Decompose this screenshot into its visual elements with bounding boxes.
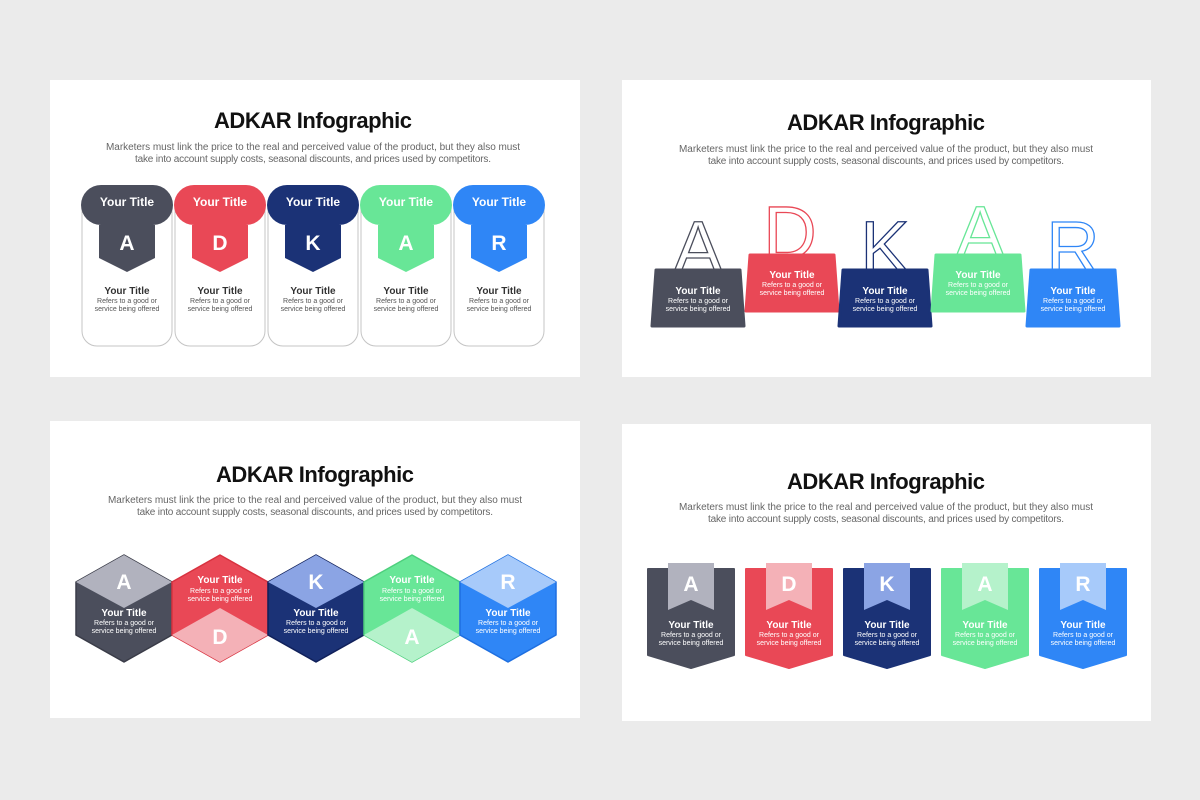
panel: bottom-left hexagons: Refers to a good or xyxy=(478,620,539,627)
panel: bottom-left hexagons: service being offered xyxy=(380,596,445,603)
cards: Refers to a good or xyxy=(97,298,158,305)
panel: top-right outlined letters: Refers to a good or xyxy=(668,298,729,305)
cards: Your Title xyxy=(379,195,433,209)
cards: service being offered xyxy=(95,306,160,313)
cards: Your Title xyxy=(104,286,150,297)
title: ADKAR Infographic xyxy=(787,110,985,135)
panel: bottom-right banners: K xyxy=(879,573,895,596)
panel: bottom-right banners: service being offered xyxy=(757,640,822,647)
cards: Your Title xyxy=(290,286,336,297)
subtitle: take into account supply costs, seasonal discounts, and prices used by competitors. xyxy=(708,156,1064,167)
panel: bottom-right banners: Refers to a good or xyxy=(955,632,1016,639)
panel: top-right outlined letters: service being offered xyxy=(946,290,1011,297)
panel: bottom-right banners: Your Title xyxy=(668,620,714,631)
subtitle: Marketers must link the price to the real and perceived value of the product, but they also must xyxy=(108,495,522,506)
panel: bottom-left hexagons: Refers to a good or xyxy=(94,620,155,627)
cards xyxy=(81,185,545,346)
outlined letters: D xyxy=(763,191,817,274)
cards: Refers to a good or xyxy=(190,298,251,305)
outlined letters: A xyxy=(673,206,723,289)
panel: bottom-right banners xyxy=(622,424,1151,721)
trapezoid boxes xyxy=(652,255,1119,326)
panel: bottom-left hexagons: service being offered xyxy=(284,628,349,635)
panel: bottom-left hexagons: D xyxy=(212,626,228,649)
subtitle: take into account supply costs, seasonal discounts, and prices used by competitors. xyxy=(708,514,1064,525)
panel: bottom-right banners: Refers to a good or xyxy=(759,632,820,639)
panel: bottom-left hexagons: service being offered xyxy=(476,628,541,635)
panel: top-right outlined letters: service being offered xyxy=(666,306,731,313)
subtitle: Marketers must link the price to the real and perceived value of the product, but they also must xyxy=(679,144,1093,155)
cards: service being offered xyxy=(467,306,532,313)
panel: top-right outlined letters: Your Title xyxy=(1050,286,1096,297)
title: ADKAR Infographic xyxy=(216,462,414,487)
cards: Your Title xyxy=(476,286,522,297)
cards: Your Title xyxy=(383,286,429,297)
cards: Your Title xyxy=(193,195,247,209)
subtitle: take into account supply costs, seasonal discounts, and prices used by competitors. xyxy=(137,507,493,518)
panel: top-left card layout xyxy=(50,80,580,377)
panel: top-right outlined letters: service being offered xyxy=(853,306,918,313)
panel: bottom-right banners: service being offered xyxy=(659,640,724,647)
panel: top-right outlined letters: Your Title xyxy=(675,286,721,297)
outlined letters: A xyxy=(955,191,1005,274)
cards: Refers to a good or xyxy=(283,298,344,305)
panel: bottom-right banners: A xyxy=(977,573,993,596)
panel: bottom-left hexagons: Refers to a good or xyxy=(286,620,347,627)
outlined letters xyxy=(673,191,1100,289)
hexagons xyxy=(76,555,556,662)
title: ADKAR Infographic xyxy=(787,469,985,494)
panel: bottom-left hexagons xyxy=(50,421,580,718)
subtitle xyxy=(108,495,522,518)
subtitle xyxy=(106,142,520,165)
panel: bottom-right banners: Your Title xyxy=(1060,620,1106,631)
panel: bottom-right banners: service being offered xyxy=(855,640,920,647)
cards: A xyxy=(398,232,414,255)
panel: bottom-left hexagons: Your Title xyxy=(485,608,531,619)
panel: bottom-left hexagons: R xyxy=(500,571,516,594)
panel: bottom-right banners: Your Title xyxy=(962,620,1008,631)
panel: top-right outlined letters: Refers to a good or xyxy=(948,282,1009,289)
outlined letters: R xyxy=(1046,206,1100,289)
panel: top-right outlined letters: Refers to a good or xyxy=(1043,298,1104,305)
panel: bottom-left hexagons: Your Title xyxy=(101,608,147,619)
cards: Refers to a good or xyxy=(469,298,530,305)
subtitle: Marketers must link the price to the real and perceived value of the product, but they also must xyxy=(106,142,520,153)
cards: Your Title xyxy=(286,195,340,209)
panel: bottom-right banners: D xyxy=(781,573,797,596)
panel: bottom-right banners: Refers to a good or xyxy=(661,632,722,639)
panel: top-right outlined letters xyxy=(622,80,1151,377)
panel: bottom-left hexagons: service being offered xyxy=(188,596,253,603)
cards: service being offered xyxy=(281,306,346,313)
cards: Your Title xyxy=(472,195,526,209)
panel: top-right outlined letters: Your Title xyxy=(769,270,815,281)
panel: bottom-right banners: service being offered xyxy=(1051,640,1116,647)
subtitle xyxy=(679,502,1093,525)
panel: bottom-left hexagons: Your Title xyxy=(389,575,435,586)
panel: top-right outlined letters: service being offered xyxy=(760,290,825,297)
panel: bottom-left hexagons: A xyxy=(116,571,132,594)
panel: bottom-right banners: A xyxy=(683,573,699,596)
panel: bottom-right banners: Refers to a good or xyxy=(1053,632,1114,639)
subtitle: Marketers must link the price to the real and perceived value of the product, but they also must xyxy=(679,502,1093,513)
panel: top-right outlined letters: service being offered xyxy=(1041,306,1106,313)
panel: top-right outlined letters: Refers to a good or xyxy=(762,282,823,289)
panel: bottom-left hexagons: Your Title xyxy=(293,608,339,619)
panel: bottom-left hexagons: K xyxy=(308,571,324,594)
cards: service being offered xyxy=(188,306,253,313)
cards: D xyxy=(212,232,228,255)
panel: bottom-left hexagons: Your Title xyxy=(197,575,243,586)
cards: A xyxy=(119,232,135,255)
cards: Your Title xyxy=(197,286,243,297)
banners xyxy=(648,563,1126,668)
panel: bottom-left hexagons: A xyxy=(404,626,420,649)
panel: bottom-right banners: R xyxy=(1075,573,1091,596)
panel: bottom-right banners: Refers to a good or xyxy=(857,632,918,639)
cards: service being offered xyxy=(374,306,439,313)
panel: bottom-right banners: Your Title xyxy=(766,620,812,631)
panel: bottom-right banners: Your Title xyxy=(864,620,910,631)
panel: top-right outlined letters: Your Title xyxy=(862,286,908,297)
panel: bottom-right banners: service being offered xyxy=(953,640,1018,647)
cards: Refers to a good or xyxy=(376,298,437,305)
cards: K xyxy=(305,232,321,255)
panel: bottom-left hexagons: Refers to a good or xyxy=(382,588,443,595)
title: ADKAR Infographic xyxy=(214,108,412,133)
outlined letters: K xyxy=(860,206,910,289)
panel: top-right outlined letters: Your Title xyxy=(955,270,1001,281)
cards: Your Title xyxy=(100,195,154,209)
cards: R xyxy=(491,232,507,255)
panel: bottom-left hexagons: service being offered xyxy=(92,628,157,635)
subtitle: take into account supply costs, seasonal discounts, and prices used by competitors. xyxy=(135,154,491,165)
panel: top-right outlined letters: Refers to a good or xyxy=(855,298,916,305)
panel: bottom-left hexagons: Refers to a good or xyxy=(190,588,251,595)
subtitle xyxy=(679,144,1093,167)
